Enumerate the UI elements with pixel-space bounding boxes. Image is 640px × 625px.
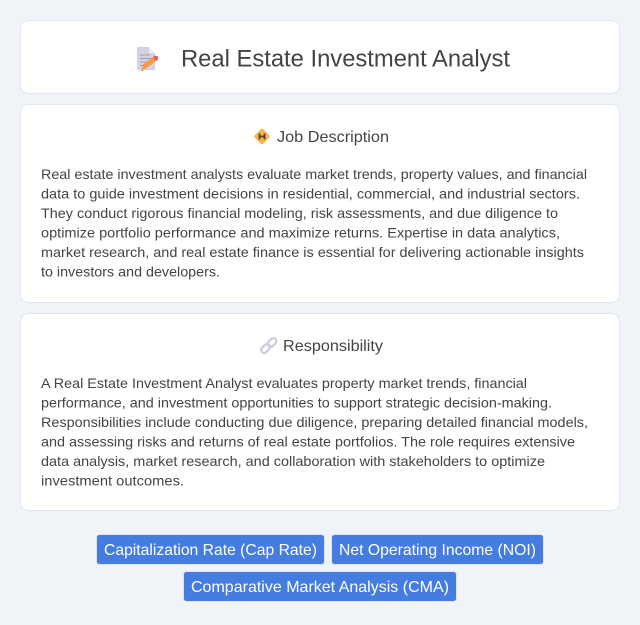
text: responsibility body: performance, and investment opportunities to support strategic decision-making. (41, 394, 552, 410)
panel: job description (20, 104, 620, 302)
text: job description body: to investors and developers. (41, 264, 220, 280)
tag: cap rate (96, 534, 324, 564)
text: responsibility body: and assessing risks and returns of real estate portfolios. The role requires extensive (41, 434, 575, 450)
tag: cma: Comparative Market Analysis (CMA) (191, 579, 449, 596)
text: responsibility body (41, 375, 588, 488)
panel: title (20, 20, 620, 94)
heading: responsibility: Responsibility (283, 338, 383, 355)
text: responsibility body: A Real Estate Investment Analyst evaluates property market trends, financial (41, 375, 527, 391)
icon: diamond sign (254, 128, 270, 145)
icon: chain link (260, 337, 278, 354)
text: responsibility body: data analysis, market research, and collaboration with stakeholders to optimize (41, 453, 545, 469)
text: job description body: data to guide investment decisions in residential, commercial, and industrial sectors. (41, 186, 580, 202)
text: job description body: optimize portfolio performance and maximize returns. Expertise in data analytics, (41, 224, 560, 240)
tag: noi: Net Operating Income (NOI) (339, 542, 536, 559)
heading: main title: Real Estate Investment Analyst (181, 46, 510, 72)
heading: job description: Job Description (277, 129, 389, 146)
tag: cma (184, 572, 456, 602)
panel: responsibility (20, 314, 620, 510)
tag: cap rate: Capitalization Rate (Cap Rate) (104, 542, 317, 559)
text: job description body: market research, and real estate finance is essential for delivering actionable insights (41, 244, 584, 260)
text: job description body: They conduct rigorous financial modeling, risk assessments, and due diligence to (41, 205, 558, 221)
text: responsibility body: investment outcomes. (41, 472, 184, 488)
icon: document with pencil (137, 47, 158, 71)
text: job description body (41, 166, 587, 280)
text: responsibility body: Responsibilities include conducting due diligence, preparing detailed financial models, (41, 414, 588, 430)
tag: noi (332, 534, 544, 564)
text: job description body: Real estate investment analysts evaluate market trends, property values, and financial (41, 166, 587, 182)
